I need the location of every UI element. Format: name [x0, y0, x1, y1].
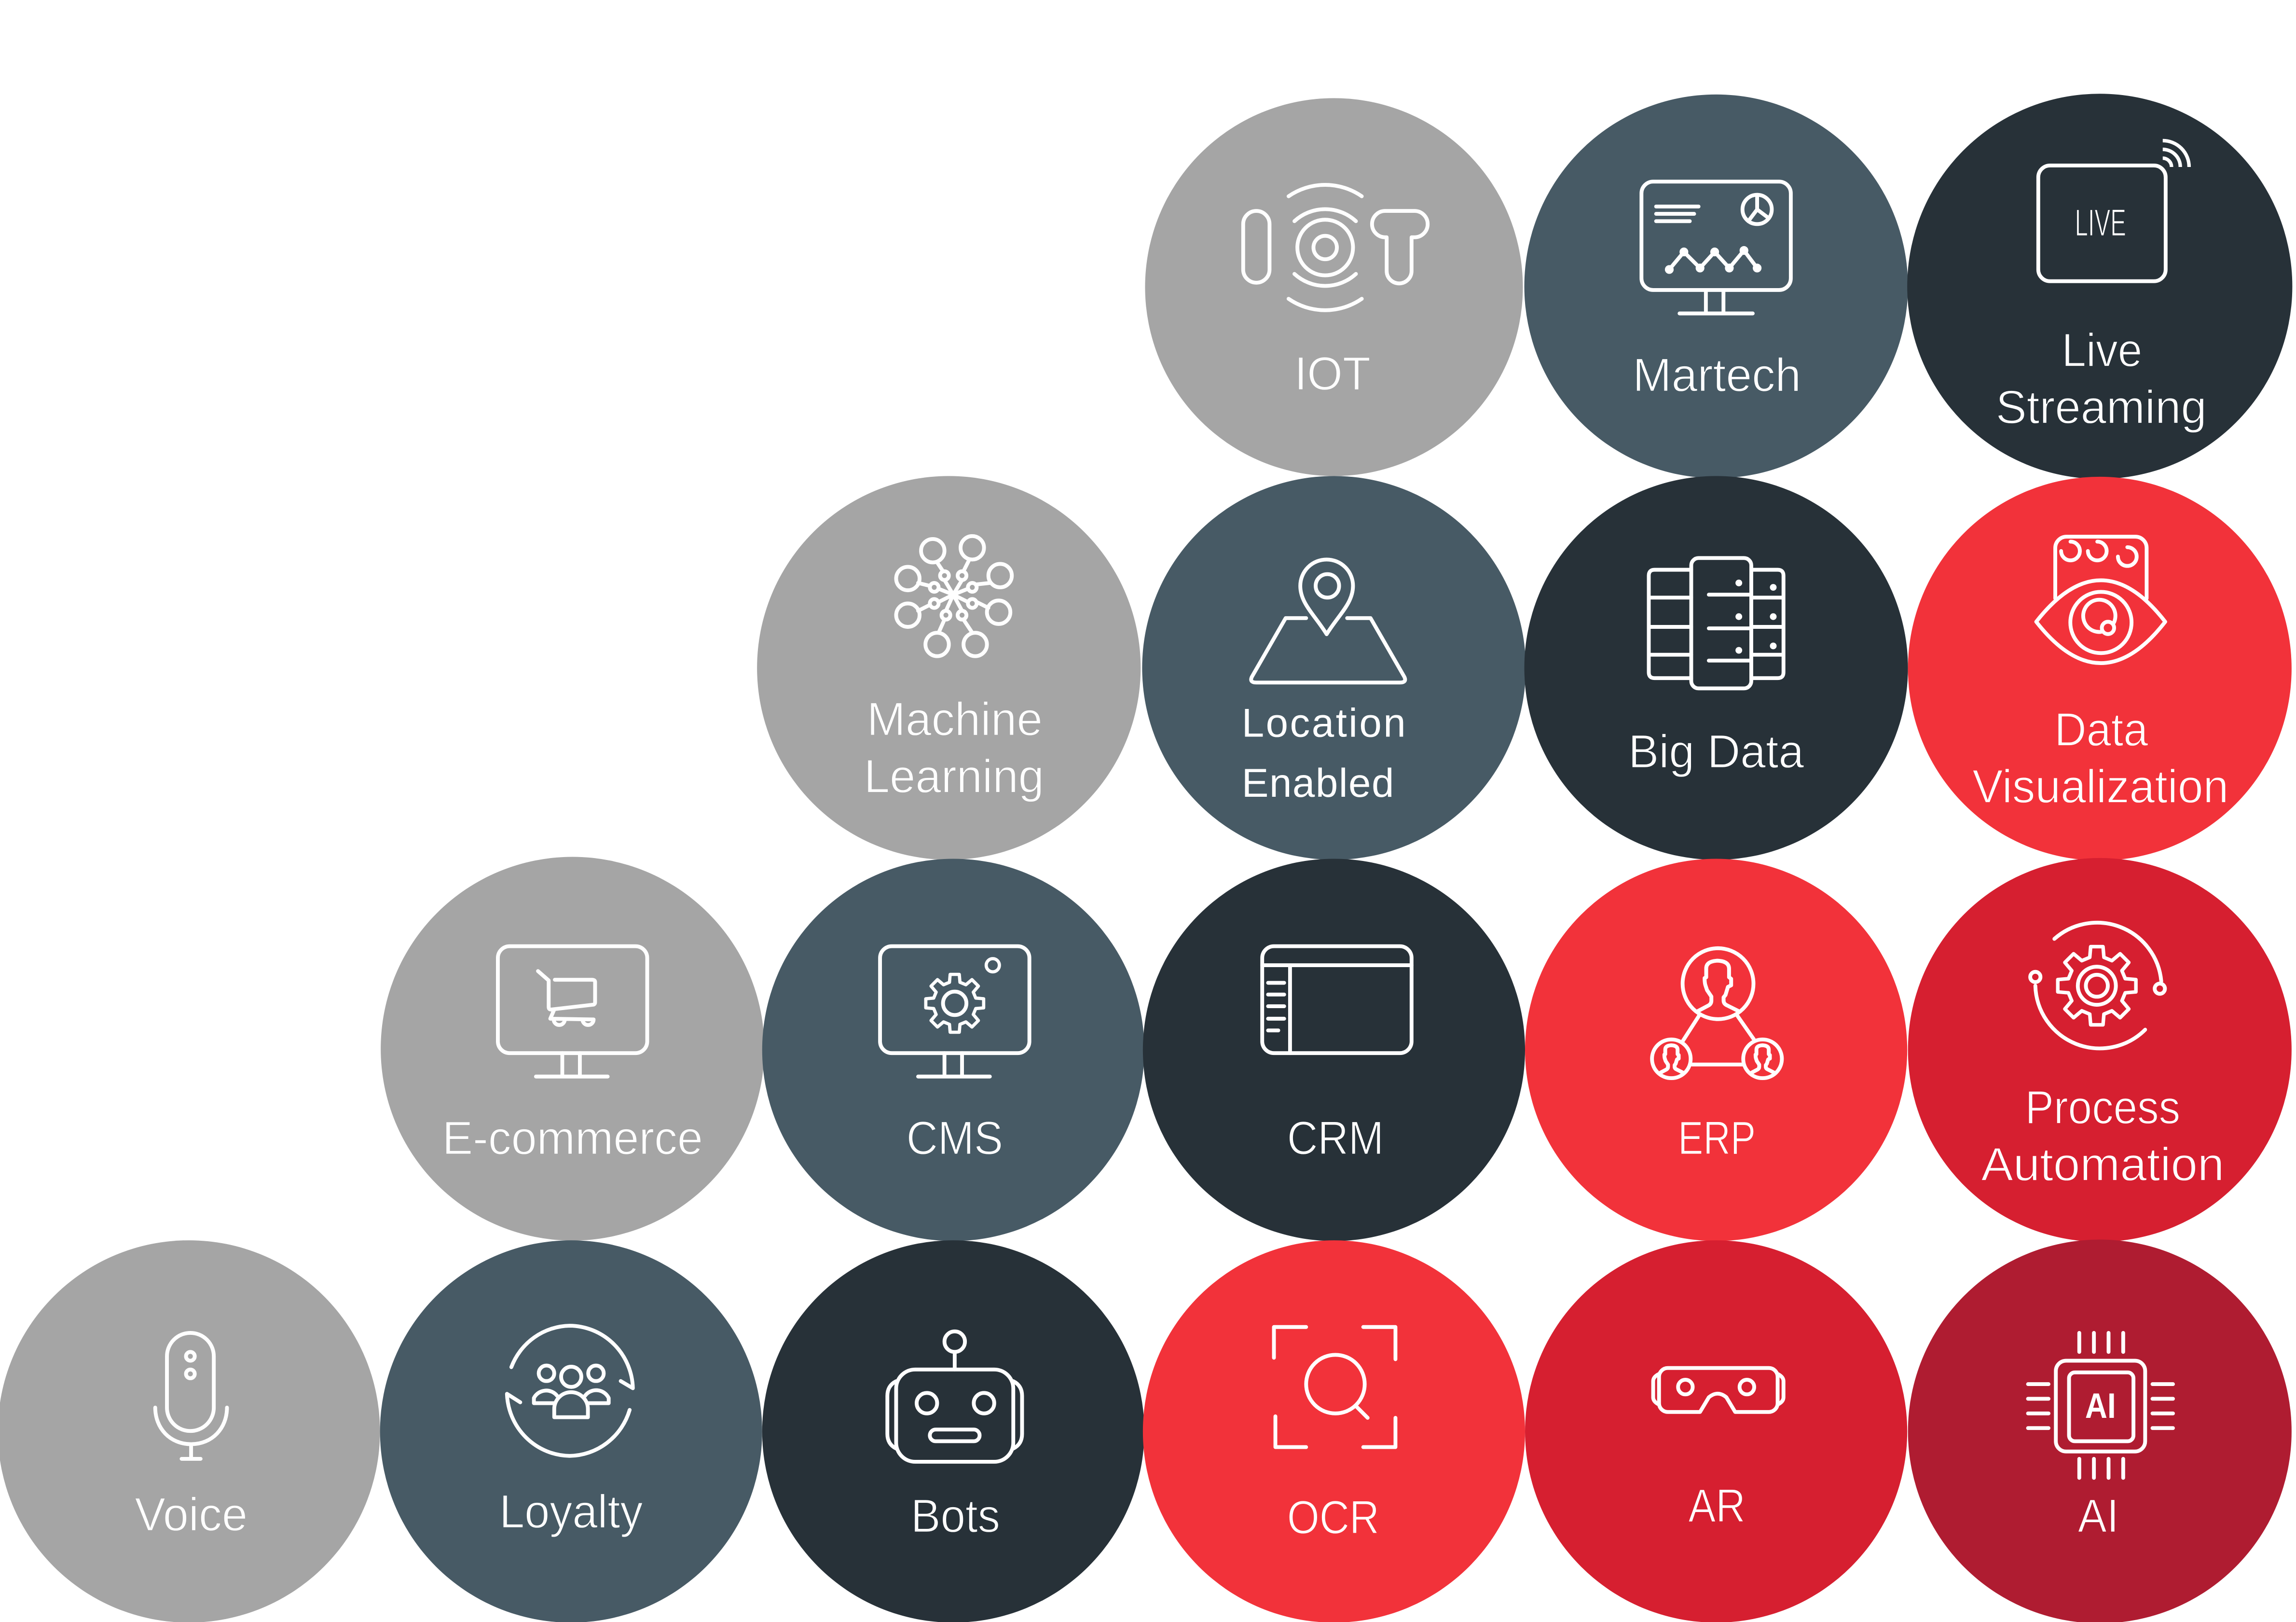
icon: IOT	[1243, 185, 1428, 310]
label: Live Streaming: Streaming	[1996, 381, 2207, 433]
label: Location Enabled: Location	[1242, 700, 1406, 746]
panel: Bots	[762, 1240, 1144, 1622]
label: Live Streaming	[1996, 324, 2207, 433]
icon: map pin	[1251, 559, 1405, 682]
label: CMS: CMS	[907, 1112, 1003, 1165]
panel: Big Data	[1525, 476, 1908, 860]
panel: Machine Learning	[757, 476, 1141, 860]
label: Live Streaming: Live	[2062, 324, 2142, 376]
panel: Location Enabled	[1142, 476, 1526, 860]
icon: VR headset	[1653, 1368, 1784, 1412]
label: Location Enabled: Enabled	[1242, 760, 1394, 805]
label: Data Visualization	[1972, 703, 2228, 813]
label: Martech: Martech	[1633, 348, 1801, 401]
icon: eye with chart	[2036, 537, 2165, 663]
icon: microphone	[155, 1333, 227, 1459]
panel: OCR	[1143, 1240, 1525, 1622]
icon: live screen	[2038, 140, 2189, 281]
panel: AI	[1908, 1240, 2292, 1622]
label: AR: AR	[1688, 1479, 1746, 1532]
icon: scan magnifier	[1274, 1327, 1395, 1447]
label: Machine Learning: Learning	[864, 750, 1044, 803]
icon: AI chip: AI	[2085, 1386, 2116, 1426]
label: OCR: OCR	[1287, 1491, 1379, 1544]
label: Data Visualization: Visualization	[1972, 760, 2228, 813]
label: AI: AI	[2078, 1490, 2119, 1542]
label: Process Automation	[1981, 1081, 2224, 1191]
icon: AI chip	[2028, 1333, 2173, 1478]
label: ERP: ERP	[1678, 1112, 1756, 1165]
panel: CRM	[1143, 859, 1525, 1241]
icon: servers	[1649, 558, 1784, 688]
panel: CMS	[762, 859, 1144, 1241]
label: Location Enabled	[1242, 700, 1406, 805]
icon: monitor with gear	[880, 946, 1030, 1077]
label: E-commerce: E-commerce	[442, 1112, 703, 1165]
label: Data Visualization: Data	[2054, 703, 2148, 756]
panel: E-commerce	[381, 857, 764, 1241]
label: IOT: IOT	[1294, 347, 1371, 400]
label: Bots: Bots	[911, 1490, 1000, 1542]
label: Machine Learning: Machine	[867, 693, 1043, 746]
icon: monitor with cart	[498, 946, 647, 1077]
icon: connected people	[1652, 948, 1782, 1078]
panel: Process Automation	[1908, 858, 2292, 1242]
label: Loyalty: Loyalty	[499, 1485, 643, 1538]
panel: IOT	[1145, 98, 1523, 476]
panel: Data Visualization	[1908, 477, 2292, 860]
label: CRM: CRM	[1287, 1112, 1384, 1165]
panel: AR	[1525, 1240, 1907, 1622]
icon: monitor with dashboard	[1641, 181, 1791, 313]
panel: Martech	[1525, 95, 1908, 478]
panel: Live Streaming	[1907, 94, 2292, 479]
icon: app window	[1262, 946, 1412, 1053]
icon: people with cycle arrows	[507, 1326, 633, 1456]
panel: Voice	[0, 1240, 380, 1622]
icon: live screen: LIVE	[2075, 202, 2126, 244]
label: Voice: Voice	[135, 1488, 247, 1541]
panel: ERP	[1525, 859, 1907, 1241]
panel: Loyalty	[380, 1240, 762, 1622]
label: Process Automation: Process	[2025, 1081, 2180, 1134]
icon: neural network	[896, 536, 1012, 656]
label: Process Automation: Automation	[1981, 1138, 2224, 1191]
icon: robot head	[887, 1331, 1022, 1462]
label: Machine Learning	[864, 693, 1044, 803]
icon: gear with cycle	[2030, 923, 2165, 1048]
label: Big Data: Big Data	[1628, 725, 1804, 777]
